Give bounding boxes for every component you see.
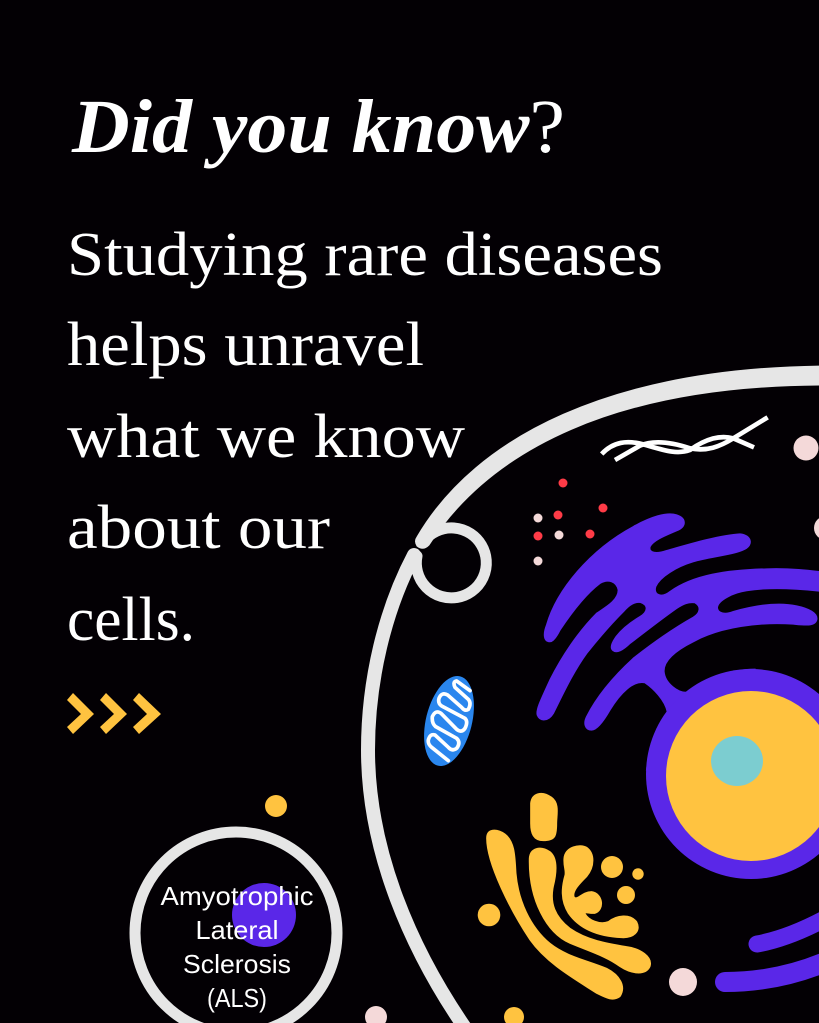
nucleolus [711,736,763,786]
vesicle bottom [669,968,697,996]
cell membrane [368,366,819,1023]
vesicle right [814,516,819,540]
cell illustration [368,366,819,1023]
DNA strand [602,417,768,460]
ALS label: Sclerosis [183,949,291,979]
nucleus envelope [646,669,819,879]
body text: helps unravel [67,311,424,379]
ALS label: (ALS) [207,983,267,1013]
ALS neuron cell [135,832,337,1023]
nucleus [666,691,819,861]
ALS label: Amyotrophic [160,881,314,911]
mitochondrion [416,671,482,771]
body text: cells. [67,586,195,654]
vesicle top [794,436,818,460]
golgi apparatus [487,793,650,999]
small pink dot [365,1006,387,1023]
body text: what we know [67,403,465,471]
ALS label [160,881,314,1013]
ALS label: Lateral [196,915,278,945]
lower reticulum strips [725,916,819,982]
body text: Studying rare diseases [67,221,663,289]
body text [67,221,663,654]
ribosome dots [534,478,608,566]
icon: chevron arrows [67,693,161,734]
cell outline [135,832,337,1023]
title: Did you know ? [71,85,565,169]
purple nucleus [232,883,296,947]
golgi vesicles [478,856,644,1023]
small yellow dot [265,795,287,817]
body text: about our [67,494,330,562]
endoplasmic reticulum [537,514,819,770]
